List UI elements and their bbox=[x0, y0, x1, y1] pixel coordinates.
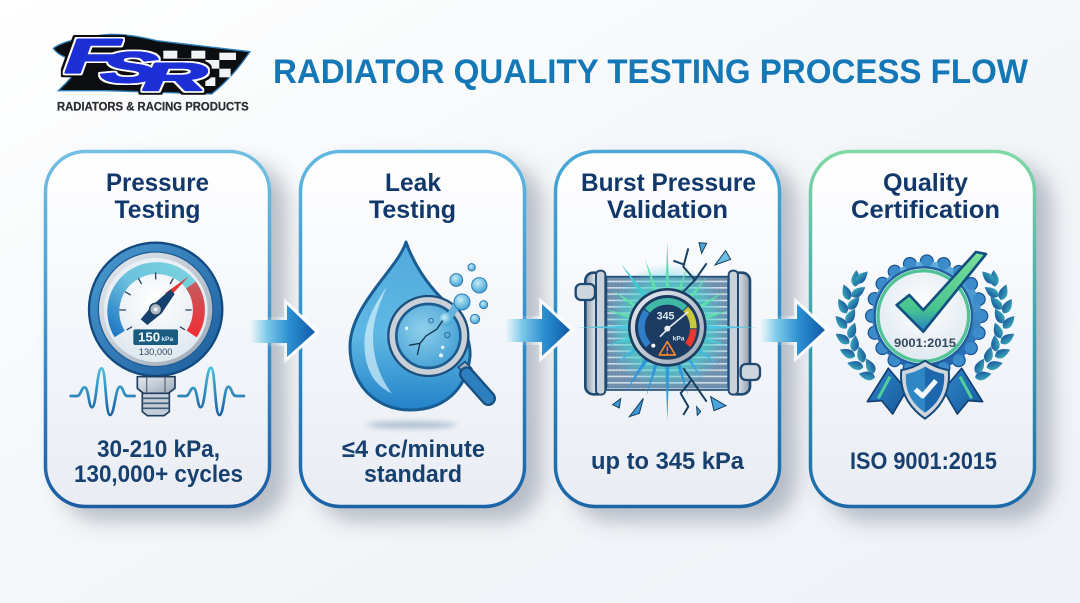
card frame bbox=[46, 152, 270, 506]
panel: leak testing bbox=[300, 152, 524, 506]
logo letters FSR: S bbox=[101, 44, 159, 92]
logo letters FSR bbox=[65, 30, 208, 99]
icon: certification badge bbox=[832, 252, 1018, 419]
spec: pressure range and cycles: 30-210 kPa, bbox=[97, 436, 220, 463]
spec: leak rate bbox=[342, 436, 485, 488]
heading: leak testing: Testing bbox=[369, 196, 456, 224]
heading: burst pressure validation: Burst Pressure bbox=[581, 169, 756, 197]
heading: leak testing bbox=[369, 169, 456, 224]
heading: pressure testing bbox=[106, 169, 209, 224]
heading: quality certification: Certification bbox=[851, 196, 1000, 224]
panel: burst pressure validation bbox=[556, 152, 780, 506]
spec: ISO standard: ISO 9001:2015 bbox=[850, 448, 997, 475]
card frame bbox=[300, 152, 524, 506]
logo swoosh with checkered flag bbox=[53, 34, 250, 94]
logo letters FSR: F bbox=[65, 30, 122, 84]
heading: pressure testing: Testing bbox=[114, 196, 200, 224]
arrow: leak to burst bbox=[505, 304, 570, 356]
icon: radiator with burst gauge: kPa bbox=[673, 336, 685, 343]
heading: quality certification bbox=[851, 169, 1000, 224]
logo letters FSR: R bbox=[143, 55, 208, 99]
arrow: burst to certification bbox=[760, 304, 825, 356]
icon: pressure gauge: 150 bbox=[138, 330, 160, 345]
icon: pressure gauge: kPa bbox=[161, 336, 173, 343]
heading: leak testing: Leak bbox=[385, 169, 441, 197]
spec: leak rate: standard bbox=[364, 461, 462, 488]
icon: radiator with burst gauge: 345 bbox=[657, 310, 675, 322]
card frame bbox=[556, 152, 780, 506]
logo: FSR Radiators & Racing Products bbox=[53, 30, 250, 114]
heading: burst pressure validation: Validation bbox=[607, 196, 728, 224]
heading: quality certification: Quality bbox=[883, 169, 968, 197]
spec: burst pressure: up to 345 kPa bbox=[591, 448, 745, 475]
icon: certification badge: 9001:2015 bbox=[894, 336, 956, 350]
spec: pressure range and cycles bbox=[74, 436, 243, 488]
logo tagline: RADIATORS & RACING PRODUCTS bbox=[57, 100, 249, 114]
panel: pressure testing bbox=[46, 152, 270, 506]
title: RADIATOR QUALITY TESTING PROCESS FLOW bbox=[273, 53, 1029, 91]
icon: radiator with burst gauge bbox=[576, 241, 760, 421]
spec: pressure range and cycles: 130,000+ cycles bbox=[74, 461, 243, 488]
card frame bbox=[810, 152, 1034, 506]
spec: leak rate: ≤4 cc/minute bbox=[342, 436, 485, 463]
arrow: pressure to leak bbox=[250, 305, 315, 357]
icon: pressure gauge bbox=[71, 243, 244, 416]
icon: pressure gauge: 130,000 bbox=[139, 347, 173, 357]
panel: quality certification bbox=[810, 152, 1034, 506]
heading: burst pressure validation bbox=[581, 169, 756, 224]
heading: pressure testing: Pressure bbox=[106, 169, 209, 197]
icon: water drop with magnifier bbox=[350, 242, 488, 429]
